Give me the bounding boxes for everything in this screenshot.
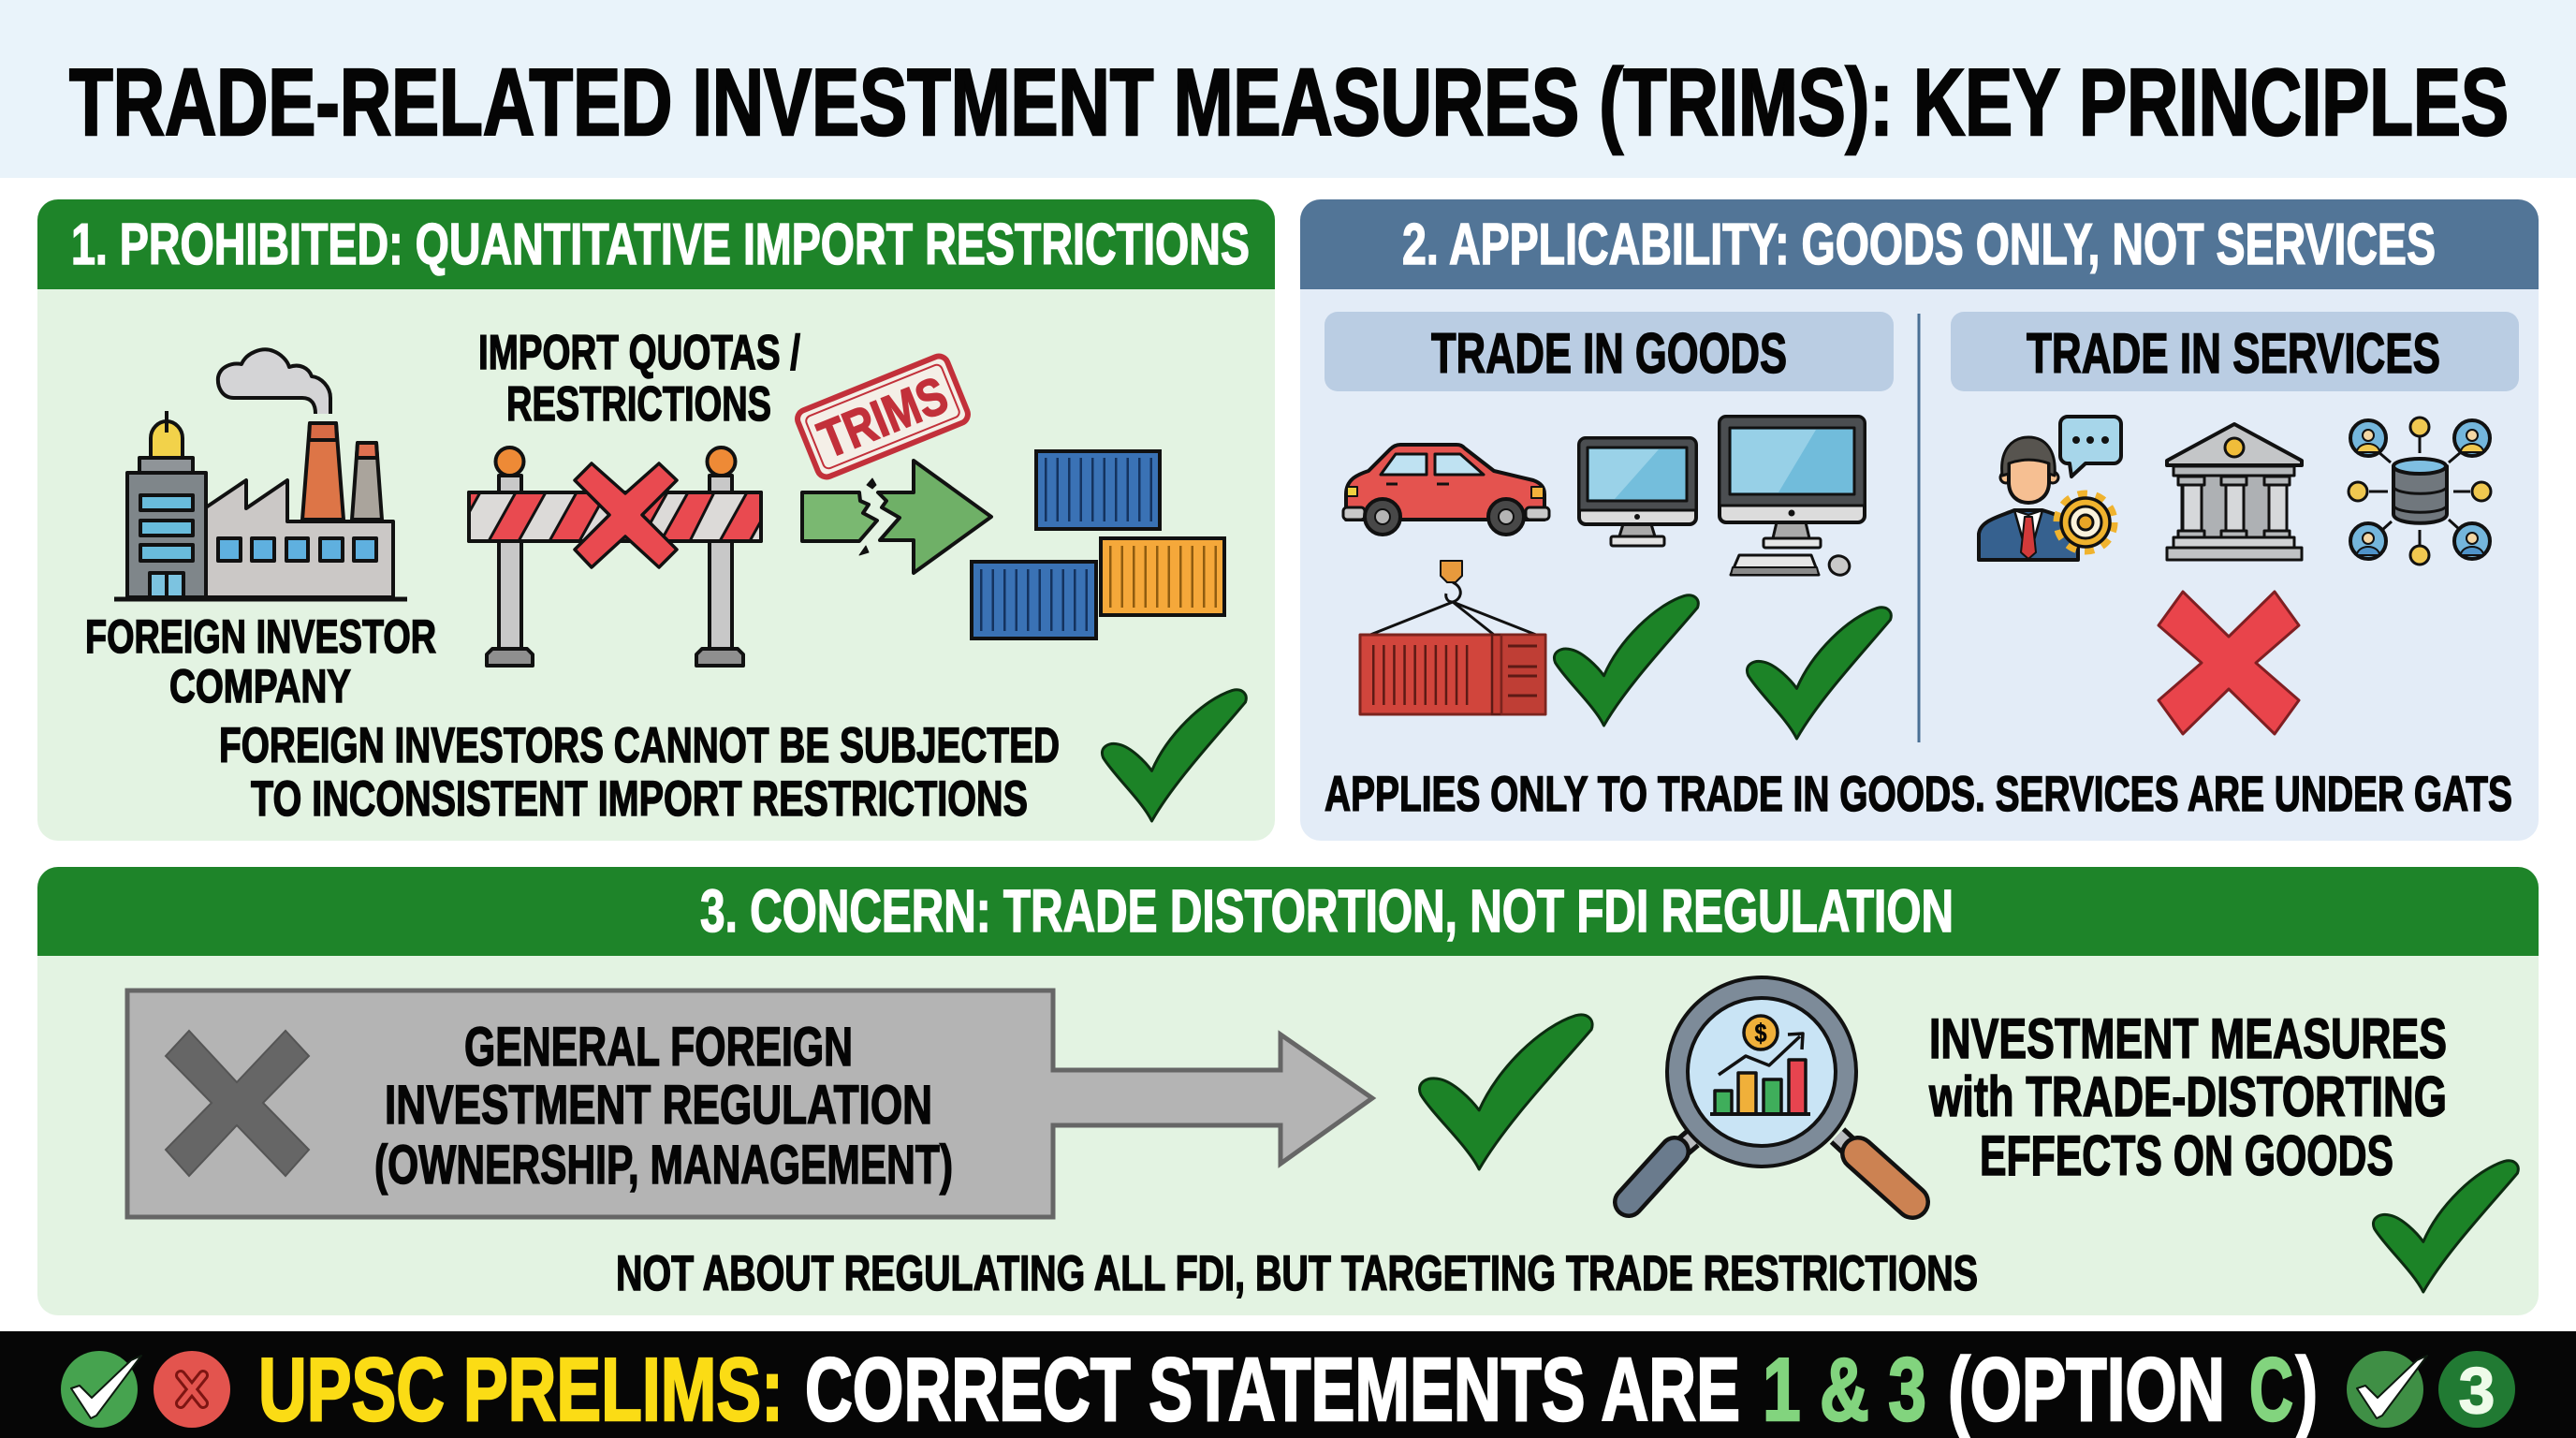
icon: foreign investor factory <box>114 349 407 599</box>
statement: investment measures with trade-distorting effects: EFFECTS ON GOODS <box>1980 1124 2393 1187</box>
grey box label: (OWNERSHIP, MANAGEMENT) <box>374 1135 953 1196</box>
icon: green check after arrow <box>1420 1015 1592 1169</box>
grey box label: GENERAL FOREIGN <box>464 1017 853 1078</box>
icon: magnifying glass with chart: $ <box>1754 1019 1767 1048</box>
subheading: trade in goods <box>1325 312 1894 391</box>
icon: shipping containers <box>972 451 1224 638</box>
icon: TRIMS stamp: TRIMS <box>811 365 956 469</box>
label: foreign investor company: COMPANY <box>169 660 351 712</box>
subheading: trade in services <box>1951 312 2519 391</box>
title band <box>0 0 2576 178</box>
statement: foreign investors: TO INCONSISTENT IMPORT RESTRICTIONS <box>251 771 1028 827</box>
icon: right green check badge <box>2347 1351 2427 1428</box>
icon: number 3 badge: 3 <box>2459 1354 2495 1427</box>
statement: not about regulating all FDI: NOT ABOUT REGULATING ALL FDI, BUT TARGETING TRADE RESTRICTIONS <box>616 1246 1978 1301</box>
answer text: option: (OPTION <box>1948 1340 2225 1438</box>
label: import quotas: RESTRICTIONS <box>506 377 771 432</box>
icon: bank building <box>2167 424 2302 560</box>
icon: green check goods 1 <box>1554 595 1698 726</box>
icon: number 3 badge <box>2438 1351 2515 1428</box>
label: import quotas: IMPORT QUOTAS / <box>478 326 800 380</box>
icon: grey cross <box>166 1031 309 1176</box>
icon: green check <box>1102 690 1246 821</box>
panel: 2 applicability goods only <box>1300 199 2539 841</box>
icon: broken green arrow <box>802 461 991 573</box>
panel 3 heading: 3. CONCERN: TRADE DISTORTION, NOT FDI REGULATION <box>700 877 1954 945</box>
answer text: C: C <box>2249 1340 2293 1438</box>
icon: red cross services <box>2159 592 2299 734</box>
icon: green check goods 2 <box>1747 608 1891 739</box>
grey box arrow: general foreign investment regulation <box>127 990 1372 1217</box>
answer text: UPSC prelims: UPSC PRELIMS: <box>258 1340 783 1438</box>
icon: red cross badge <box>154 1351 230 1428</box>
icon: hoisted red container <box>1360 561 1545 714</box>
icon: small monitor <box>1579 438 1696 546</box>
icon: desktop computer with keyboard <box>1720 417 1865 579</box>
panel 1 heading <box>37 199 1275 289</box>
answer text: 1 and 3: 1 & 3 <box>1763 1340 1926 1438</box>
answer text: closing bracket: ) <box>2296 1340 2318 1438</box>
panel: 1 prohibited quantitative import restrictions <box>37 199 1275 841</box>
statement: foreign investors: FOREIGN INVESTORS CANNOT BE SUBJECTED <box>219 718 1060 773</box>
subheading: trade in services: TRADE IN SERVICES <box>2027 322 2440 385</box>
icon: data network <box>2349 418 2491 565</box>
answer text: correct statements are: CORRECT STATEMENTS ARE <box>805 1340 1740 1438</box>
icon: green check badge <box>61 1351 141 1428</box>
grey box label: INVESTMENT REGULATION <box>385 1075 932 1136</box>
icon: consultant with gear <box>1979 417 2121 560</box>
panel 1 heading: 1. PROHIBITED: QUANTITATIVE IMPORT RESTRICTIONS <box>71 213 1250 277</box>
icon: green check lower right <box>2373 1161 2518 1292</box>
icon: car <box>1343 445 1549 535</box>
icon: magnifying glass with chart <box>1629 977 1912 1202</box>
panel: 3 concern trade distortion <box>37 867 2539 1315</box>
panel 2 heading <box>1300 199 2539 289</box>
label: foreign investor company: FOREIGN INVESTOR <box>85 610 436 663</box>
panel 3 heading <box>37 867 2539 956</box>
subheading: trade in goods: TRADE IN GOODS <box>1431 322 1787 385</box>
icon: barrier with red cross <box>467 446 763 668</box>
answer bar <box>0 1331 2576 1438</box>
